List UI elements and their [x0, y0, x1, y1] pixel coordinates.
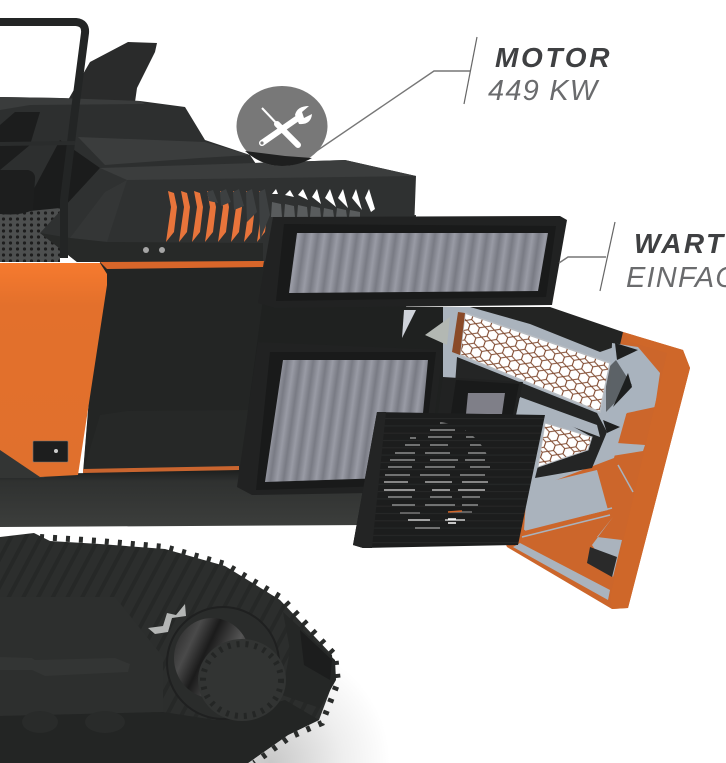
track lower run [0, 700, 319, 763]
screwdriver [262, 108, 298, 145]
wartung leader line [559, 257, 606, 263]
motor value: 449 KW [488, 75, 600, 107]
sprocket hub with bolts [198, 639, 286, 721]
rear cylinder [0, 170, 35, 214]
dark upper vent tips [207, 189, 270, 240]
motor label [488, 42, 612, 107]
ground shadow [150, 643, 390, 763]
hood vents [166, 189, 375, 242]
second hood level [78, 137, 250, 165]
filter panel small [437, 377, 523, 420]
sprocket drum [174, 618, 250, 698]
cab seat wedge [68, 42, 157, 102]
wrench [260, 106, 312, 145]
orange rim [610, 332, 690, 609]
light sprocket highlight [148, 604, 186, 634]
upper honeycomb mesh [460, 313, 610, 412]
door backing [400, 307, 470, 400]
dark corner facets [603, 343, 638, 433]
fender dark corner [0, 445, 45, 478]
fan grille [353, 412, 545, 548]
black patch [587, 547, 617, 577]
orange lower trim [83, 466, 239, 473]
drive sprocket ring [167, 607, 279, 719]
silver door interior [443, 307, 626, 490]
badge circle [236, 86, 328, 166]
hood rear dark area [20, 140, 100, 215]
filter mesh [265, 360, 428, 482]
upper deck [0, 97, 260, 215]
track body [0, 533, 334, 763]
filter panel middle [237, 342, 443, 495]
silver spike [612, 443, 645, 456]
motor leader tick [464, 37, 477, 104]
dark bands around mesh [455, 357, 607, 478]
dark door top [470, 307, 623, 352]
hood screws [143, 247, 165, 253]
silver corner [608, 343, 660, 440]
wartung label [626, 228, 726, 294]
track right shoes [282, 612, 336, 708]
fan blades seen through slits [384, 422, 490, 528]
crawler track [0, 533, 338, 763]
grey lower vents [271, 202, 360, 217]
upper deck top strip [0, 97, 145, 110]
perforated deck plate [0, 208, 60, 262]
fender latch [33, 441, 68, 462]
handrail crossbar [0, 143, 75, 144]
orange vents [166, 191, 268, 242]
mesh orange edge [452, 312, 465, 355]
body side panel [83, 262, 268, 473]
motor heading: MOTOR [495, 42, 612, 73]
orange door shell [443, 307, 690, 609]
filter mesh [289, 233, 548, 293]
track side frame [0, 597, 163, 716]
lower body band [0, 470, 375, 527]
engine hood [40, 160, 416, 262]
orange upper trim [100, 261, 264, 269]
icon: wrench and screwdriver badge [236, 86, 328, 166]
lower silver facet [524, 470, 608, 530]
track rollers [22, 711, 125, 733]
lower honeycomb mesh [538, 423, 592, 467]
motor leader line [315, 71, 470, 152]
door light facets [402, 310, 450, 345]
white vent openings [272, 189, 375, 212]
silver strip between mesh [520, 397, 600, 437]
right silver facet [592, 517, 622, 577]
maintenance door [400, 307, 690, 609]
small filter mesh [466, 393, 505, 414]
thin silver lines [522, 465, 633, 537]
cab window dark area [0, 112, 40, 170]
track teeth [40, 537, 338, 763]
wartung leader tick [600, 222, 615, 291]
bottom silver strip [513, 543, 610, 600]
filter panel top [258, 216, 567, 308]
orange fender [0, 263, 107, 477]
badge shadowed bottom [245, 151, 312, 166]
body backdrop [83, 215, 445, 490]
handrail [0, 22, 85, 258]
